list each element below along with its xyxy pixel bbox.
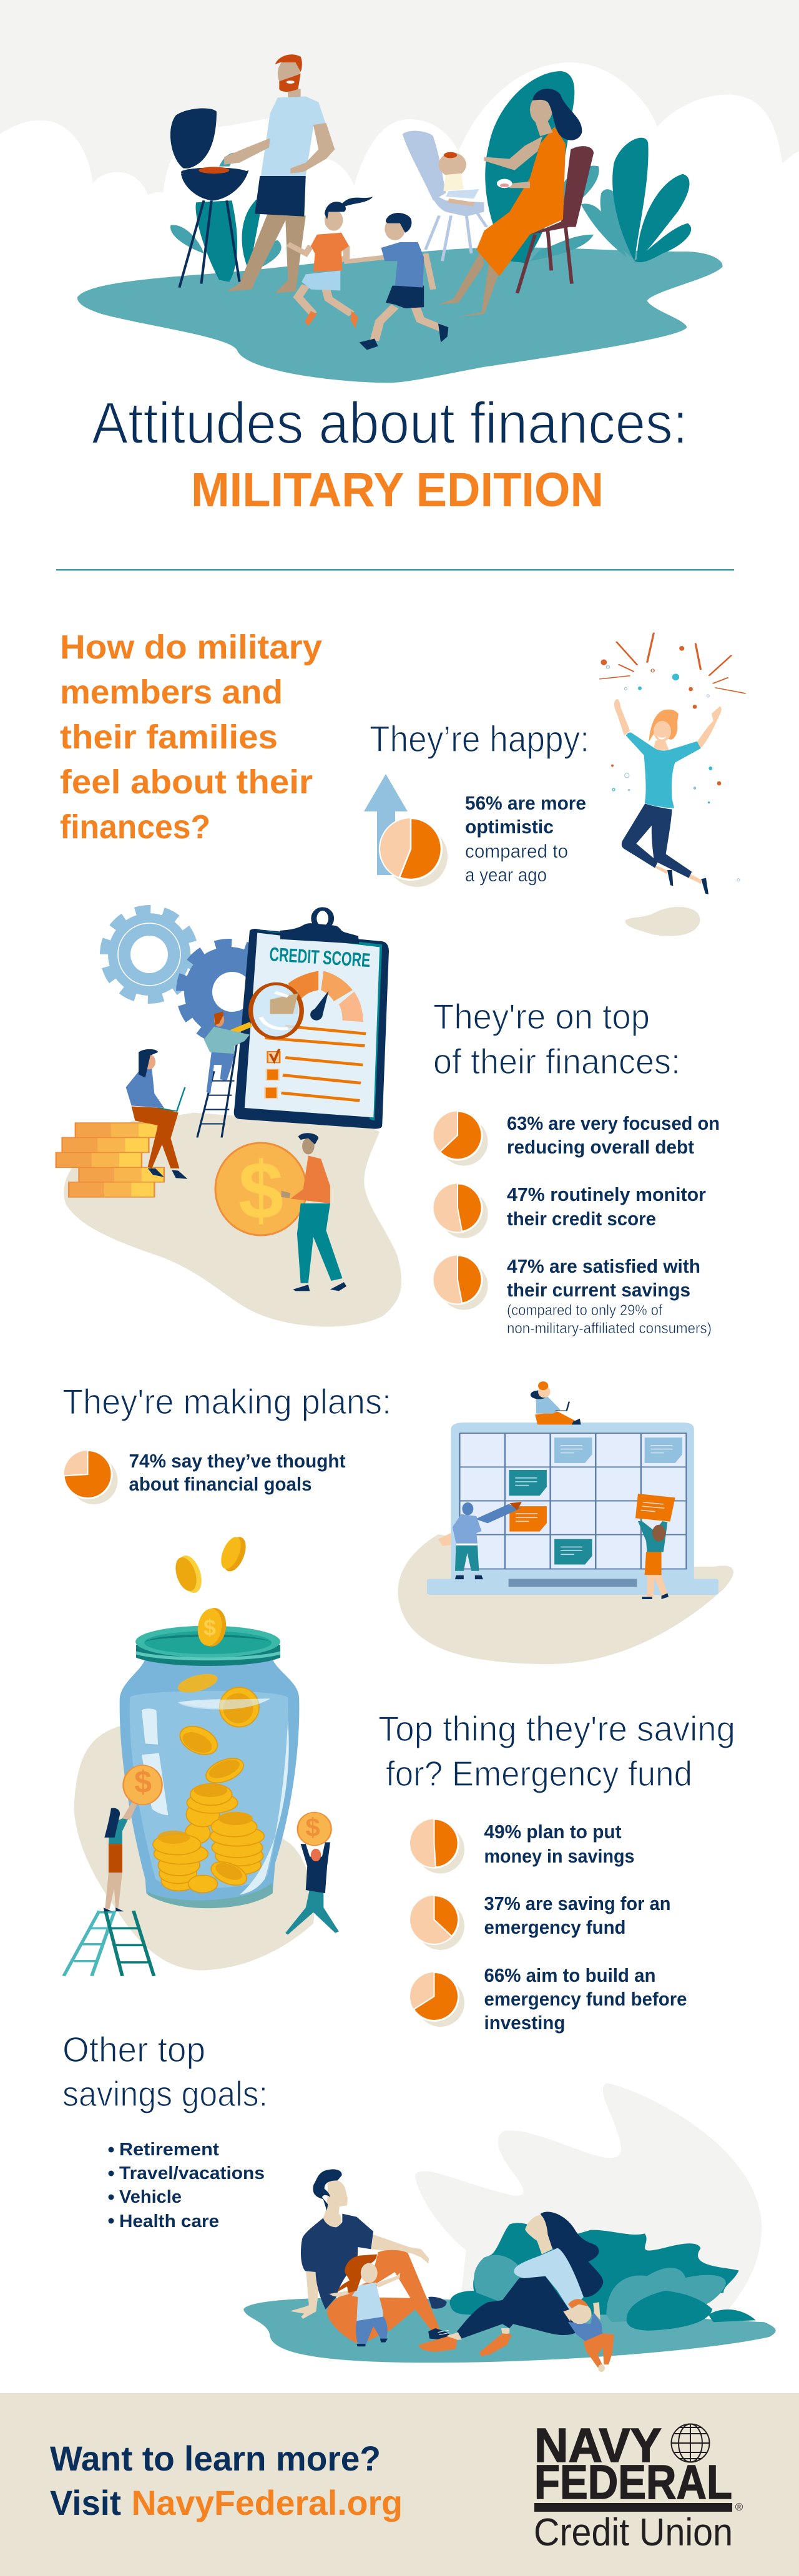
coin entering jar (195, 1606, 228, 1648)
boy (344, 213, 448, 350)
illustration: scenery behind relaxing family (243, 2083, 776, 2363)
heading: other top savings goals: Other top (62, 2030, 205, 2070)
stat: debt: 63% are very focused on (507, 1112, 720, 1134)
neck (654, 740, 669, 750)
girl (329, 2255, 400, 2346)
illustration: credit score (56, 909, 401, 1326)
gears (105, 911, 277, 1039)
girl (288, 197, 373, 328)
list: savings goals: Health care (119, 2211, 219, 2231)
beige blob (74, 1726, 314, 1971)
call to action: Visit (50, 2483, 121, 2522)
ladder (64, 1911, 154, 1976)
stat: savings plan: money in savings (484, 1845, 634, 1867)
icon: globe (672, 2424, 709, 2462)
ground (243, 2298, 776, 2363)
logo: Navy Federal Credit Union (534, 2419, 743, 2554)
jar body (120, 1659, 299, 1908)
stat: savings: their current savings (507, 1279, 690, 1301)
fireworks (600, 633, 745, 693)
dollar sign: $ (238, 1145, 283, 1236)
heading: other top savings goals: savings goals: (62, 2074, 268, 2114)
pie: 49 percent (409, 1818, 464, 1874)
magnifier with man on ladder (204, 984, 301, 1094)
heading: on top of their finances: of their finances: (433, 1042, 680, 1082)
man with coin (282, 1133, 346, 1291)
title: Attitudes about finances: (92, 390, 688, 456)
logo: Navy Federal Credit Union: ® (735, 2501, 743, 2513)
illustration: savings jar (74, 1659, 314, 1971)
heading: making plans: They're making plans: (62, 1382, 391, 1422)
shadow blob (625, 907, 700, 936)
woman (419, 2212, 603, 2356)
top translucent coin (176, 1670, 219, 1696)
stat: credit score: their credit score (507, 1208, 656, 1230)
jar lid, ladder and people (64, 1626, 339, 1976)
coin faces (157, 1693, 253, 1883)
icon: up arrow (364, 774, 408, 875)
stat: optimistic: compared to (465, 840, 568, 862)
stat: credit score: 47% routinely monitor (507, 1183, 706, 1205)
stat: emergency fund: 37% are saving for an (484, 1893, 670, 1914)
stat: optimistic: a year ago (465, 864, 547, 886)
heading: on top of their finances: They're on top (433, 997, 650, 1037)
grill (170, 109, 248, 288)
dollar signs on coins (134, 1615, 320, 1842)
heading: question: their families (60, 718, 278, 756)
confetti dots (611, 687, 740, 881)
stat: credit score (507, 1183, 706, 1230)
title: MILITARY EDITION (191, 463, 604, 517)
pie: 66 percent (409, 1971, 464, 2027)
heading: question: members and (60, 673, 283, 711)
stat: financial goals: about financial goals (129, 1473, 312, 1495)
list: savings goals: Travel/vacations (119, 2163, 265, 2183)
cloud background (0, 0, 799, 195)
stat: debt: reducing overall debt (507, 1136, 694, 1158)
illustration: jumping woman (611, 687, 740, 936)
stat: savings: (compared to only 29% of (507, 1302, 662, 1319)
heading: other top savings goals (62, 2030, 268, 2114)
man (290, 2169, 450, 2343)
ladder (197, 1042, 237, 1137)
stat: optimistic: 56% are more (465, 792, 586, 814)
falling coins (172, 1534, 250, 1596)
dollar signs on coins: $ (203, 1615, 216, 1640)
woman on chair (438, 89, 594, 317)
face (654, 721, 671, 742)
heading: question (60, 629, 322, 846)
credit score label: CREDIT SCORE (269, 943, 371, 971)
ankles (655, 866, 701, 884)
hair (649, 710, 679, 742)
smile (657, 736, 666, 740)
coins inside jar (153, 1670, 270, 1893)
pie: 63 percent (432, 1110, 488, 1166)
stat: optimistic (465, 792, 586, 886)
heading: question: How do military (60, 629, 322, 666)
stat: before investing: investing (484, 2012, 566, 2034)
bowl highlight (178, 1698, 270, 1710)
stat: debt (507, 1112, 720, 1158)
jar lid (135, 1626, 280, 1666)
call to action (50, 2439, 403, 2522)
heading: question: feel about their (60, 763, 313, 801)
stat: before investing: 66% aim to build an (484, 1964, 655, 1986)
illustration: calendar laptop (398, 1381, 733, 1664)
stat: savings (507, 1255, 712, 1337)
big coin (215, 1143, 306, 1235)
bushes (450, 2223, 756, 2331)
woman with coin (104, 1765, 162, 1911)
person with pencil (438, 1502, 522, 1579)
stat: financial goals: 74% say they’ve thought (129, 1450, 346, 1472)
call to action: NavyFederal.org (131, 2483, 403, 2522)
stat: savings: non-military-affiliated consumers) (507, 1320, 712, 1337)
pie: 47 percent savings (432, 1255, 488, 1310)
man with coin (285, 1813, 339, 1934)
beige blob (398, 1534, 733, 1664)
clipboard (234, 909, 389, 1129)
title (92, 390, 688, 517)
dollar signs on coins: $ (134, 1765, 152, 1800)
high chair and baby (403, 131, 487, 261)
list: savings goals: Retirement (119, 2140, 219, 2160)
person with note (638, 1521, 669, 1599)
ground (77, 247, 723, 383)
shoes (667, 870, 708, 894)
laptop and grid (427, 1423, 718, 1595)
gray blob background (415, 2083, 762, 2314)
pie: 37 percent (409, 1894, 464, 1950)
logo: Navy Federal Credit Union: FEDERAL (534, 2456, 732, 2509)
list: savings goals (109, 2140, 265, 2231)
woman with laptop (126, 1049, 187, 1179)
list: savings goals: Vehicle (119, 2187, 182, 2207)
jar highlights (142, 1699, 289, 1908)
beige blob (64, 1113, 401, 1326)
illustration: relaxing family (290, 2169, 614, 2372)
pants (622, 803, 692, 878)
stat: optimistic: optimistic (465, 816, 554, 838)
stat: before investing: emergency fund before (484, 1988, 687, 2010)
heading: they're happy: They’re happy: (370, 719, 589, 760)
logo: Navy Federal Credit Union: Credit Union (534, 2511, 733, 2554)
stat: savings: 47% are satisfied with (507, 1255, 700, 1277)
pie: 47 percent credit (432, 1182, 488, 1238)
plants (170, 71, 691, 282)
pie: 74 percent (62, 1449, 117, 1504)
logo: Navy Federal Credit Union: NAVY (534, 2419, 662, 2472)
hero illustration: family barbecue (0, 0, 799, 383)
pie: 56 percent (379, 817, 448, 887)
heading: top thing saving for: for? Emergency fund (386, 1754, 692, 1794)
dollar signs on coins: $ (305, 1813, 320, 1842)
toddler (563, 2299, 614, 2372)
stat: savings plan (484, 1821, 634, 1867)
coin pile (153, 1687, 264, 1893)
stat: before investing (484, 1964, 687, 2034)
stat: savings plan: 49% plan to put (484, 1821, 622, 1843)
heading: top thing saving for: Top thing they're saving (378, 1709, 735, 1749)
heading: on top of their finances (433, 997, 680, 1082)
heading: top thing saving for (378, 1709, 735, 1794)
person on top (531, 1381, 581, 1424)
jar glass (130, 1691, 288, 1888)
man (224, 54, 335, 293)
arms (614, 699, 722, 748)
stat: financial goals (129, 1450, 346, 1495)
coin stack (56, 1123, 164, 1197)
stat: emergency fund: emergency fund (484, 1916, 625, 1938)
stat: emergency fund (484, 1893, 670, 1938)
footer banner (0, 2393, 799, 2576)
call to action: Want to learn more? (50, 2439, 381, 2478)
heading: question: finances? (60, 808, 210, 846)
shirt (626, 732, 701, 808)
